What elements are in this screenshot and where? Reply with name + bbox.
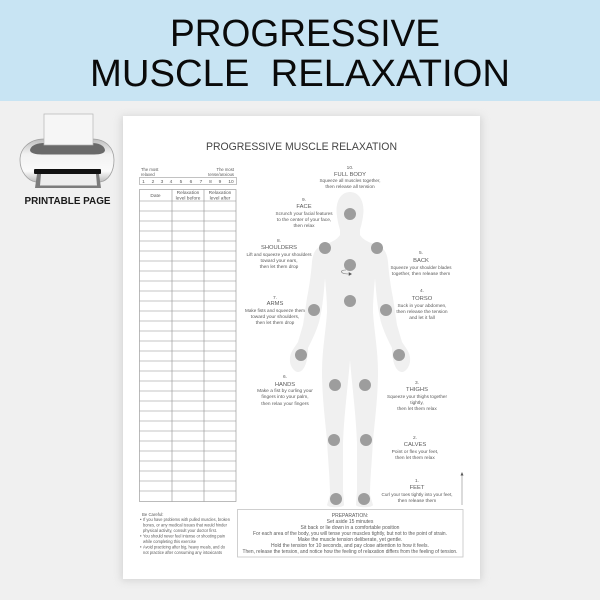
- step 5: back: together, then release them: [392, 271, 450, 277]
- scale legend: 8: [209, 179, 212, 185]
- scale legend: 4: [170, 179, 173, 185]
- caution notes: Be Careful:: [142, 512, 164, 517]
- step 3: thighs: then let them relax: [397, 406, 437, 412]
- step 10: full body: [320, 165, 380, 190]
- body target points: [295, 208, 405, 505]
- caution notes: physical activity, consult your doctor first.: [143, 528, 217, 533]
- step 5: back: BACK: [413, 258, 429, 264]
- step 4: torso: Suck in your abdomen,: [397, 303, 447, 309]
- step 4: torso: 4.: [420, 288, 424, 294]
- step 5: back: 5.: [419, 250, 423, 256]
- scale legend: The most: [141, 167, 159, 172]
- step 7: arms: [245, 295, 305, 326]
- step 6: hands: [257, 374, 313, 407]
- step 5: back: [390, 250, 452, 277]
- preparation box: Make the muscle tension deliberate, yet gentle.: [298, 537, 402, 543]
- step 2: calves: [392, 435, 438, 461]
- step 9: face: 9.: [302, 197, 306, 203]
- caution notes: [140, 512, 231, 555]
- scale legend: 6: [190, 179, 193, 185]
- step 3: thighs: Squeeze your thighs together: [387, 394, 447, 400]
- step 1: feet: 1.: [415, 478, 419, 484]
- scale legend: tense/anxious: [208, 172, 234, 177]
- caution notes: Avoid practicing after big, heavy meals, and do: [143, 544, 226, 550]
- step 2: calves: Point or flex your feet,: [392, 449, 438, 455]
- step 8: shoulders: SHOULDERS: [261, 245, 297, 251]
- step 8: shoulders: toward your ears,: [260, 258, 298, 264]
- icon: curved arrow: [341, 270, 352, 276]
- step 4: torso: and let it fall: [409, 315, 435, 321]
- step 10: full body: then release all tension: [325, 184, 375, 190]
- preparation box: PREPARATION:: [332, 513, 368, 519]
- step 4: torso: [396, 288, 448, 321]
- icon: printer: [20, 114, 114, 188]
- step 2: calves: 2.: [413, 435, 417, 441]
- step 8: shoulders: 8.: [277, 238, 281, 244]
- step 3: thighs: 3.: [415, 380, 419, 386]
- caution notes: •: [140, 534, 142, 538]
- step 10: full body: FULL BODY: [334, 172, 366, 178]
- step 10: full body: 10.: [347, 165, 353, 171]
- caution notes: If you have problems with pulled muscles, broken: [143, 517, 231, 522]
- step 6: hands: then relax your fingers: [261, 401, 309, 407]
- scale legend: [140, 167, 236, 185]
- caution notes: •: [140, 544, 142, 550]
- caution notes: You should never feel intense or shooting pain: [143, 534, 226, 538]
- step 9: face: [276, 197, 333, 229]
- step 2: calves: CALVES: [404, 442, 426, 448]
- tracking table: [140, 190, 236, 502]
- scale legend: 2: [152, 179, 155, 185]
- caution notes: while completing this exercise: [143, 539, 197, 544]
- step 9: face: to the center of your face,: [277, 217, 331, 223]
- table headers: Relaxation: [177, 190, 200, 196]
- step 3: thighs: THIGHS: [406, 387, 428, 393]
- step 4: torso: TORSO: [412, 296, 433, 302]
- preparation box: Hold the tension for 10 seconds, and pay close attention to how it feels.: [271, 543, 429, 549]
- scale legend: 3: [161, 179, 164, 185]
- table headers: [150, 190, 232, 202]
- scale legend: The most: [217, 167, 235, 172]
- title: MUSCLE RELAXATION: [90, 53, 510, 95]
- header banner: [0, 0, 600, 101]
- table headers: Date: [150, 193, 161, 199]
- scale legend: 9: [219, 179, 222, 185]
- step 1: feet: then release them: [398, 498, 436, 504]
- step 5: back: Squeeze your shoulder blades: [390, 265, 452, 271]
- body silhouette: [290, 192, 410, 507]
- caution notes: bones, or any medical issues that would hinder: [143, 522, 228, 528]
- step 1: feet: [382, 478, 452, 504]
- step 8: shoulders: Lift and squeeze your shoulders: [246, 252, 312, 258]
- step 4: torso: then release the tension: [396, 309, 448, 315]
- document title: PROGRESSIVE MUSCLE RELAXATION: [206, 141, 397, 153]
- caution notes: not practice after consuming any intoxicants: [143, 550, 222, 555]
- table headers: level before: [176, 196, 201, 202]
- scale legend: 10: [228, 179, 234, 185]
- step 7: arms: Make fists and squeeze them: [245, 308, 305, 314]
- printable page label: PRINTABLE PAGE: [24, 196, 111, 207]
- step 7: arms: then let them drop: [256, 320, 295, 326]
- step 6: hands: 6.: [283, 374, 287, 380]
- title: [90, 13, 510, 95]
- step 9: face: then relax: [293, 223, 315, 229]
- preparation box: Sit back or lie down in a comfortable position: [301, 525, 400, 531]
- preparation box: Set aside 15 minutes: [327, 519, 374, 525]
- paper sheet: [123, 116, 480, 579]
- step 1: feet: FEET: [410, 485, 425, 491]
- preparation box: [238, 510, 463, 557]
- paper shadow: [121, 116, 482, 581]
- preparation box: For each area of the body, you will tense your muscles tightly, but not to the point of strain.: [253, 531, 447, 537]
- step 8: shoulders: then let them drop: [260, 264, 299, 270]
- arrow: upward progression: [460, 472, 464, 505]
- step 6: hands: fingers into your palm,: [261, 394, 309, 400]
- step 9: face: FACE: [296, 204, 312, 210]
- scale legend: 5: [180, 179, 183, 185]
- step 6: hands: HANDS: [275, 382, 295, 388]
- caution notes: •: [140, 517, 142, 522]
- step 8: shoulders: [246, 238, 312, 270]
- table headers: level after: [210, 196, 231, 202]
- step 7: arms: ARMS: [267, 301, 284, 307]
- scale legend: relaxed: [141, 172, 155, 177]
- step 2: calves: then let them relax: [395, 455, 435, 461]
- step 7: arms: 7.: [273, 295, 277, 301]
- scale legend: 7: [200, 179, 203, 185]
- step 9: face: Scrunch your facial features: [276, 211, 333, 217]
- step 3: thighs: tightly,: [410, 400, 424, 406]
- table headers: Relaxation: [209, 190, 232, 196]
- step 6: hands: Make a fist by curling your: [257, 388, 313, 394]
- title: PROGRESSIVE: [170, 13, 440, 55]
- step 3: thighs: [387, 380, 447, 412]
- step 7: arms: toward your shoulders,: [251, 314, 299, 320]
- scale legend: 1: [142, 179, 145, 185]
- preparation box: Then, release the tension, and notice how the feeling of relaxation differs from the feeling of tension.: [242, 549, 458, 555]
- step 10: full body: Squeeze all muscles together,: [320, 178, 380, 184]
- step 1: feet: Curl your toes tightly into your feet,: [382, 492, 452, 498]
